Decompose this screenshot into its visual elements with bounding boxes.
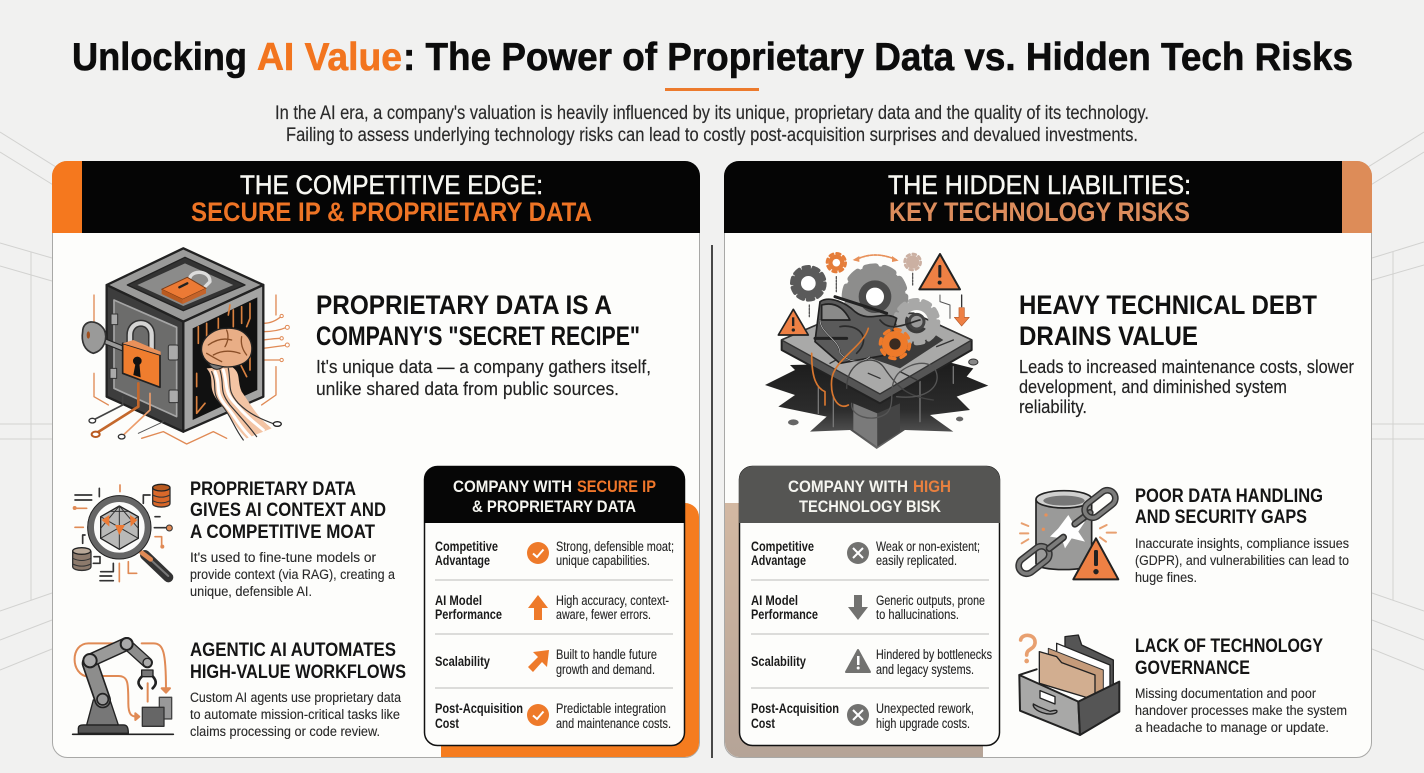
row: scalability: growth and demand. <box>556 662 655 677</box>
row: competitive advantage <box>435 539 674 568</box>
row: ai model performance: aware, fewer errors. <box>556 607 651 622</box>
heading: data handling <box>1135 486 1323 528</box>
tangled machinery <box>815 297 920 363</box>
top padlock <box>162 272 210 304</box>
row: ai model performance <box>751 593 985 622</box>
heading: governance: LACK OF TECHNOLOGY <box>1135 636 1323 657</box>
title: Unlocking <box>72 36 247 79</box>
heading: agentic ai <box>190 640 406 683</box>
heading: competitive moat: A COMPETITIVE MOAT <box>190 522 375 543</box>
warning triangle <box>1073 538 1118 579</box>
wires <box>812 328 937 418</box>
text: competitive moat body <box>190 550 395 599</box>
row: post-acquisition cost: and maintenance costs. <box>556 716 671 731</box>
row: competitive advantage: Competitive <box>435 539 498 554</box>
text: secret recipe body: unlike shared data from public sources. <box>316 378 619 399</box>
row: scalability: Scalability <box>751 654 806 669</box>
text: technical debt body: Leads to increased maintenance costs, slower <box>1019 356 1354 377</box>
row: post-acquisition cost: high upgrade costs. <box>876 716 970 731</box>
text: governance body: handover processes make the system <box>1135 703 1347 718</box>
card heading <box>788 477 951 516</box>
key <box>82 322 127 353</box>
panel: hidden liabilities <box>724 161 1372 758</box>
row: ai model performance: High accuracy, context- <box>556 593 669 608</box>
heading: competitive moat: PROPRIETARY DATA <box>190 479 356 500</box>
row: ai model performance: to hallucinations. <box>876 607 959 622</box>
heading: governance: GOVERNANCE <box>1135 658 1250 679</box>
row: post-acquisition cost: Post-Acquisition <box>751 701 839 716</box>
heading: agentic ai: AGENTIC AI AUTOMATES <box>190 640 396 661</box>
icon: technical debt gears <box>765 253 988 449</box>
subtitle: Failing to assess underlying technology risks can lead to costly post-acquisition surprises and devalued investments. <box>286 125 1138 146</box>
comparison card: high risk company <box>739 466 1000 746</box>
row: competitive advantage: Advantage <box>751 553 806 568</box>
row: post-acquisition cost <box>435 701 671 731</box>
card heading: COMPANY WITH <box>788 477 908 496</box>
heading: agentic ai: HIGH-VALUE WORKFLOWS <box>190 662 406 683</box>
gear <box>827 253 846 272</box>
heading: competitive moat: GIVES AI CONTEXT AND <box>190 500 386 521</box>
row: post-acquisition cost: Predictable integration <box>556 701 666 716</box>
row: ai model performance: Performance <box>751 607 818 622</box>
orange gear <box>880 329 910 359</box>
heading: technical debt: DRAINS VALUE <box>1019 321 1198 351</box>
row: post-acquisition cost: Post-Acquisition <box>435 701 523 716</box>
concrete slab <box>782 313 972 403</box>
gear <box>895 300 938 343</box>
text: competitive moat body: unique, defensible AI. <box>190 584 312 599</box>
text: data handling body: huge fines. <box>1135 570 1197 585</box>
text: data handling body <box>1135 536 1349 585</box>
text: competitive moat body: provide context (via RAG), creating a <box>190 567 395 582</box>
icon: magnifier over data <box>73 484 172 582</box>
text: technical debt body <box>1019 356 1354 417</box>
text: data handling body: Inaccurate insights, compliance issues <box>1135 536 1349 551</box>
text: agentic ai body <box>190 690 401 739</box>
row: ai model performance: Generic outputs, prone <box>876 593 985 608</box>
text: agentic ai body: claims processing or code review. <box>190 724 380 739</box>
card heading: SECURE IP <box>577 477 656 496</box>
row: competitive advantage: Competitive <box>751 539 814 554</box>
database <box>73 548 91 570</box>
row: ai model performance: Performance <box>435 607 502 622</box>
heading: secret recipe: COMPANY'S "SECRET RECIPE" <box>316 321 640 351</box>
heading: technical debt: HEAVY TECHNICAL DEBT <box>1019 290 1317 320</box>
panel: competitive edge <box>52 161 700 758</box>
comparison card: secure company <box>424 466 685 746</box>
row: scalability: and legacy systems. <box>876 662 974 677</box>
heading: secret recipe <box>316 290 640 351</box>
database <box>153 484 170 507</box>
text: agentic ai body: to automate mission-critical tasks like <box>190 707 400 722</box>
card heading: HIGH <box>913 477 951 496</box>
text: secret recipe body <box>316 356 651 399</box>
row: competitive advantage: easily replicated. <box>876 553 957 568</box>
row: competitive advantage: Weak or non-existent; <box>876 539 980 554</box>
heading: technical debt <box>1019 290 1317 351</box>
row: ai model performance <box>435 593 669 622</box>
card heading <box>453 477 656 516</box>
panel header: competitive edge: THE COMPETITIVE EDGE: <box>240 170 543 200</box>
heading: data handling: POOR DATA HANDLING <box>1135 486 1323 507</box>
title: AI Value <box>257 36 402 79</box>
gear <box>792 267 825 300</box>
gear <box>905 254 921 270</box>
chain links <box>1015 487 1119 577</box>
card heading: COMPANY WITH <box>453 477 572 496</box>
warning triangle <box>919 254 960 289</box>
row: post-acquisition cost: Cost <box>751 716 775 731</box>
text: agentic ai body: Custom AI agents use proprietary data <box>190 690 401 705</box>
text: governance body: Missing documentation and poor <box>1135 686 1316 701</box>
row: competitive advantage: Advantage <box>435 553 490 568</box>
subtitle <box>275 103 1149 146</box>
panel header: hidden liabilities: KEY TECHNOLOGY RISKS <box>889 197 1190 227</box>
panel header: competitive edge <box>52 161 700 233</box>
icon: file drawer with question mark <box>1019 635 1119 735</box>
text: governance body: a headache to manage or update. <box>1135 720 1329 735</box>
row: scalability <box>751 647 992 677</box>
heading: secret recipe: PROPRIETARY DATA IS A <box>316 290 612 320</box>
panel header: hidden liabilities: THE HIDDEN LIABILITIES: <box>888 170 1191 200</box>
warning triangle <box>778 309 808 335</box>
row: ai model performance: AI Model <box>751 593 798 608</box>
row: post-acquisition cost <box>751 701 974 731</box>
row: post-acquisition cost: Cost <box>435 716 459 731</box>
row: scalability <box>435 647 657 677</box>
card heading: TECHNOLOGY BISK <box>799 497 942 516</box>
heading: data handling: AND SECURITY GAPS <box>1135 507 1307 528</box>
panel header: hidden liabilities <box>724 161 1372 233</box>
row: competitive advantage <box>751 539 980 568</box>
text: technical debt body: development, and diminished system <box>1019 376 1287 397</box>
row: scalability: Built to handle future <box>556 647 657 662</box>
row: competitive advantage: Strong, defensible moat; <box>556 539 674 554</box>
padlock <box>123 323 161 387</box>
heading: governance <box>1135 636 1323 679</box>
panel header: competitive edge: SECURE IP & PROPRIETARY DATA <box>191 197 592 227</box>
text: technical debt body: reliability. <box>1019 396 1087 417</box>
icon: locked data cube <box>82 248 289 444</box>
icon: broken chain database <box>1015 487 1119 579</box>
text: governance body <box>1135 686 1347 735</box>
gear <box>845 267 905 327</box>
text: data handling body: (GDPR), and vulnerabilities can lead to <box>1135 553 1349 568</box>
row: competitive advantage: unique capabilities. <box>556 553 650 568</box>
card heading: & PROPRIETARY DATA <box>472 497 636 516</box>
icon: robot arm <box>73 638 173 734</box>
text: competitive moat body: It's used to fine-tune models or <box>190 550 376 565</box>
heading: competitive moat <box>190 479 386 543</box>
row: scalability: Hindered by bottlenecks <box>876 647 992 662</box>
text: secret recipe body: It's unique data — a company gathers itself, <box>316 356 651 377</box>
row: ai model performance: AI Model <box>435 593 482 608</box>
title: : The Power of Proprietary Data vs. Hidden Tech Risks <box>403 36 1353 79</box>
brain <box>202 328 252 369</box>
row: post-acquisition cost: Unexpected rework, <box>876 701 974 716</box>
subtitle: In the AI era, a company's valuation is heavily influenced by its unique, proprietary data and the quality of its technology. <box>275 103 1149 124</box>
row: scalability: Scalability <box>435 654 490 669</box>
